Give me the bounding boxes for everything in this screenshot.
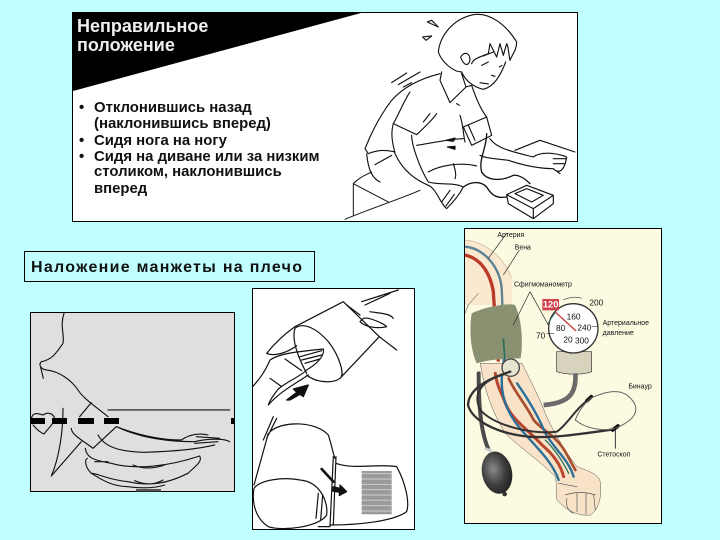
legs [85,448,200,488]
fist [559,483,595,514]
upper arm [465,240,512,305]
bullet list: Сидя нога на ногу [94,133,228,149]
bullet list: Сидя на диване или за низким [94,149,320,165]
panel: sphygmomanometer diagram: 80 [556,323,566,333]
bullet list: (наклонившись вперед) [94,116,271,132]
chair base [136,489,161,492]
heading: incorrect position: положение [77,35,175,55]
labels: давление [603,330,634,337]
heart level dashed line [31,418,234,424]
heart [31,413,55,434]
velcro tape [362,471,392,514]
title box: applying cuff: Наложение манжеты на плечо [31,259,302,276]
forearm and hand [480,363,601,515]
vein [465,247,503,365]
labels: Артериальное [603,320,649,327]
panel: sphygmomanometer diagram: 20 [563,334,573,344]
bullet list: • [79,149,84,165]
heading banner [73,13,361,91]
labels: Артерия [497,232,525,239]
bullet list: • [79,133,84,149]
sweat drops and motion lines [392,20,438,87]
panel: sphygmomanometer diagram: 160 [567,311,581,321]
labels: Бинаур [628,383,652,390]
bulb [478,449,516,497]
title box: applying cuff [24,252,314,282]
labels: Вена [515,245,531,252]
panel: sphygmomanometer diagram: 300 [575,335,589,345]
arrows [287,385,308,400]
stethoscope tubes [468,372,614,437]
bulb tube [479,373,488,448]
bullet list: столиком, наклонившись [94,164,282,180]
upper cuff [294,302,379,382]
heading: incorrect position: Неправильное [77,16,208,36]
gauge tube [544,373,575,405]
illustration: seated woman leaning with monitor [345,14,575,219]
binaural [575,392,636,430]
cuff on upper arm [463,117,492,145]
panel: sphygmomanometer diagram [464,228,662,524]
forearm, stethoscope and bulb [468,359,636,515]
cuff [470,304,522,363]
lower cuff [253,417,335,529]
gauge reading [542,299,559,310]
veins [502,375,559,480]
panel: incorrect position [72,12,578,222]
upper hand [253,349,324,405]
arm near [367,124,477,209]
panel: sphygmomanometer diagram: 240 [577,323,592,333]
artery [465,255,498,362]
body outline [40,313,230,476]
labels [497,232,652,459]
panel: arm at heart level [30,312,234,492]
gauge [557,352,592,374]
pointer lines [488,233,548,325]
panel: sphygmomanometer diagram: 120 [543,300,558,310]
labels: Сфигмоманометр [514,281,572,288]
bullet list: вперед [94,181,148,197]
labels: Стетоскоп [597,452,631,459]
seat [345,172,420,219]
tube [463,134,530,197]
panel: sphygmomanometer diagram: 70 [536,330,546,340]
hair and face [438,14,517,72]
monitor [507,185,553,219]
elbow ring [502,359,519,376]
bullet list: • [79,100,84,116]
bullet list: Отклонившись назад [94,100,252,116]
forearm and hand [98,427,230,452]
collar and shirt [365,72,487,154]
panel: sphygmomanometer diagram: 200 [589,297,604,307]
arteries [495,373,564,477]
far arm and table [480,139,575,174]
panel: putting on cuff [252,288,414,530]
